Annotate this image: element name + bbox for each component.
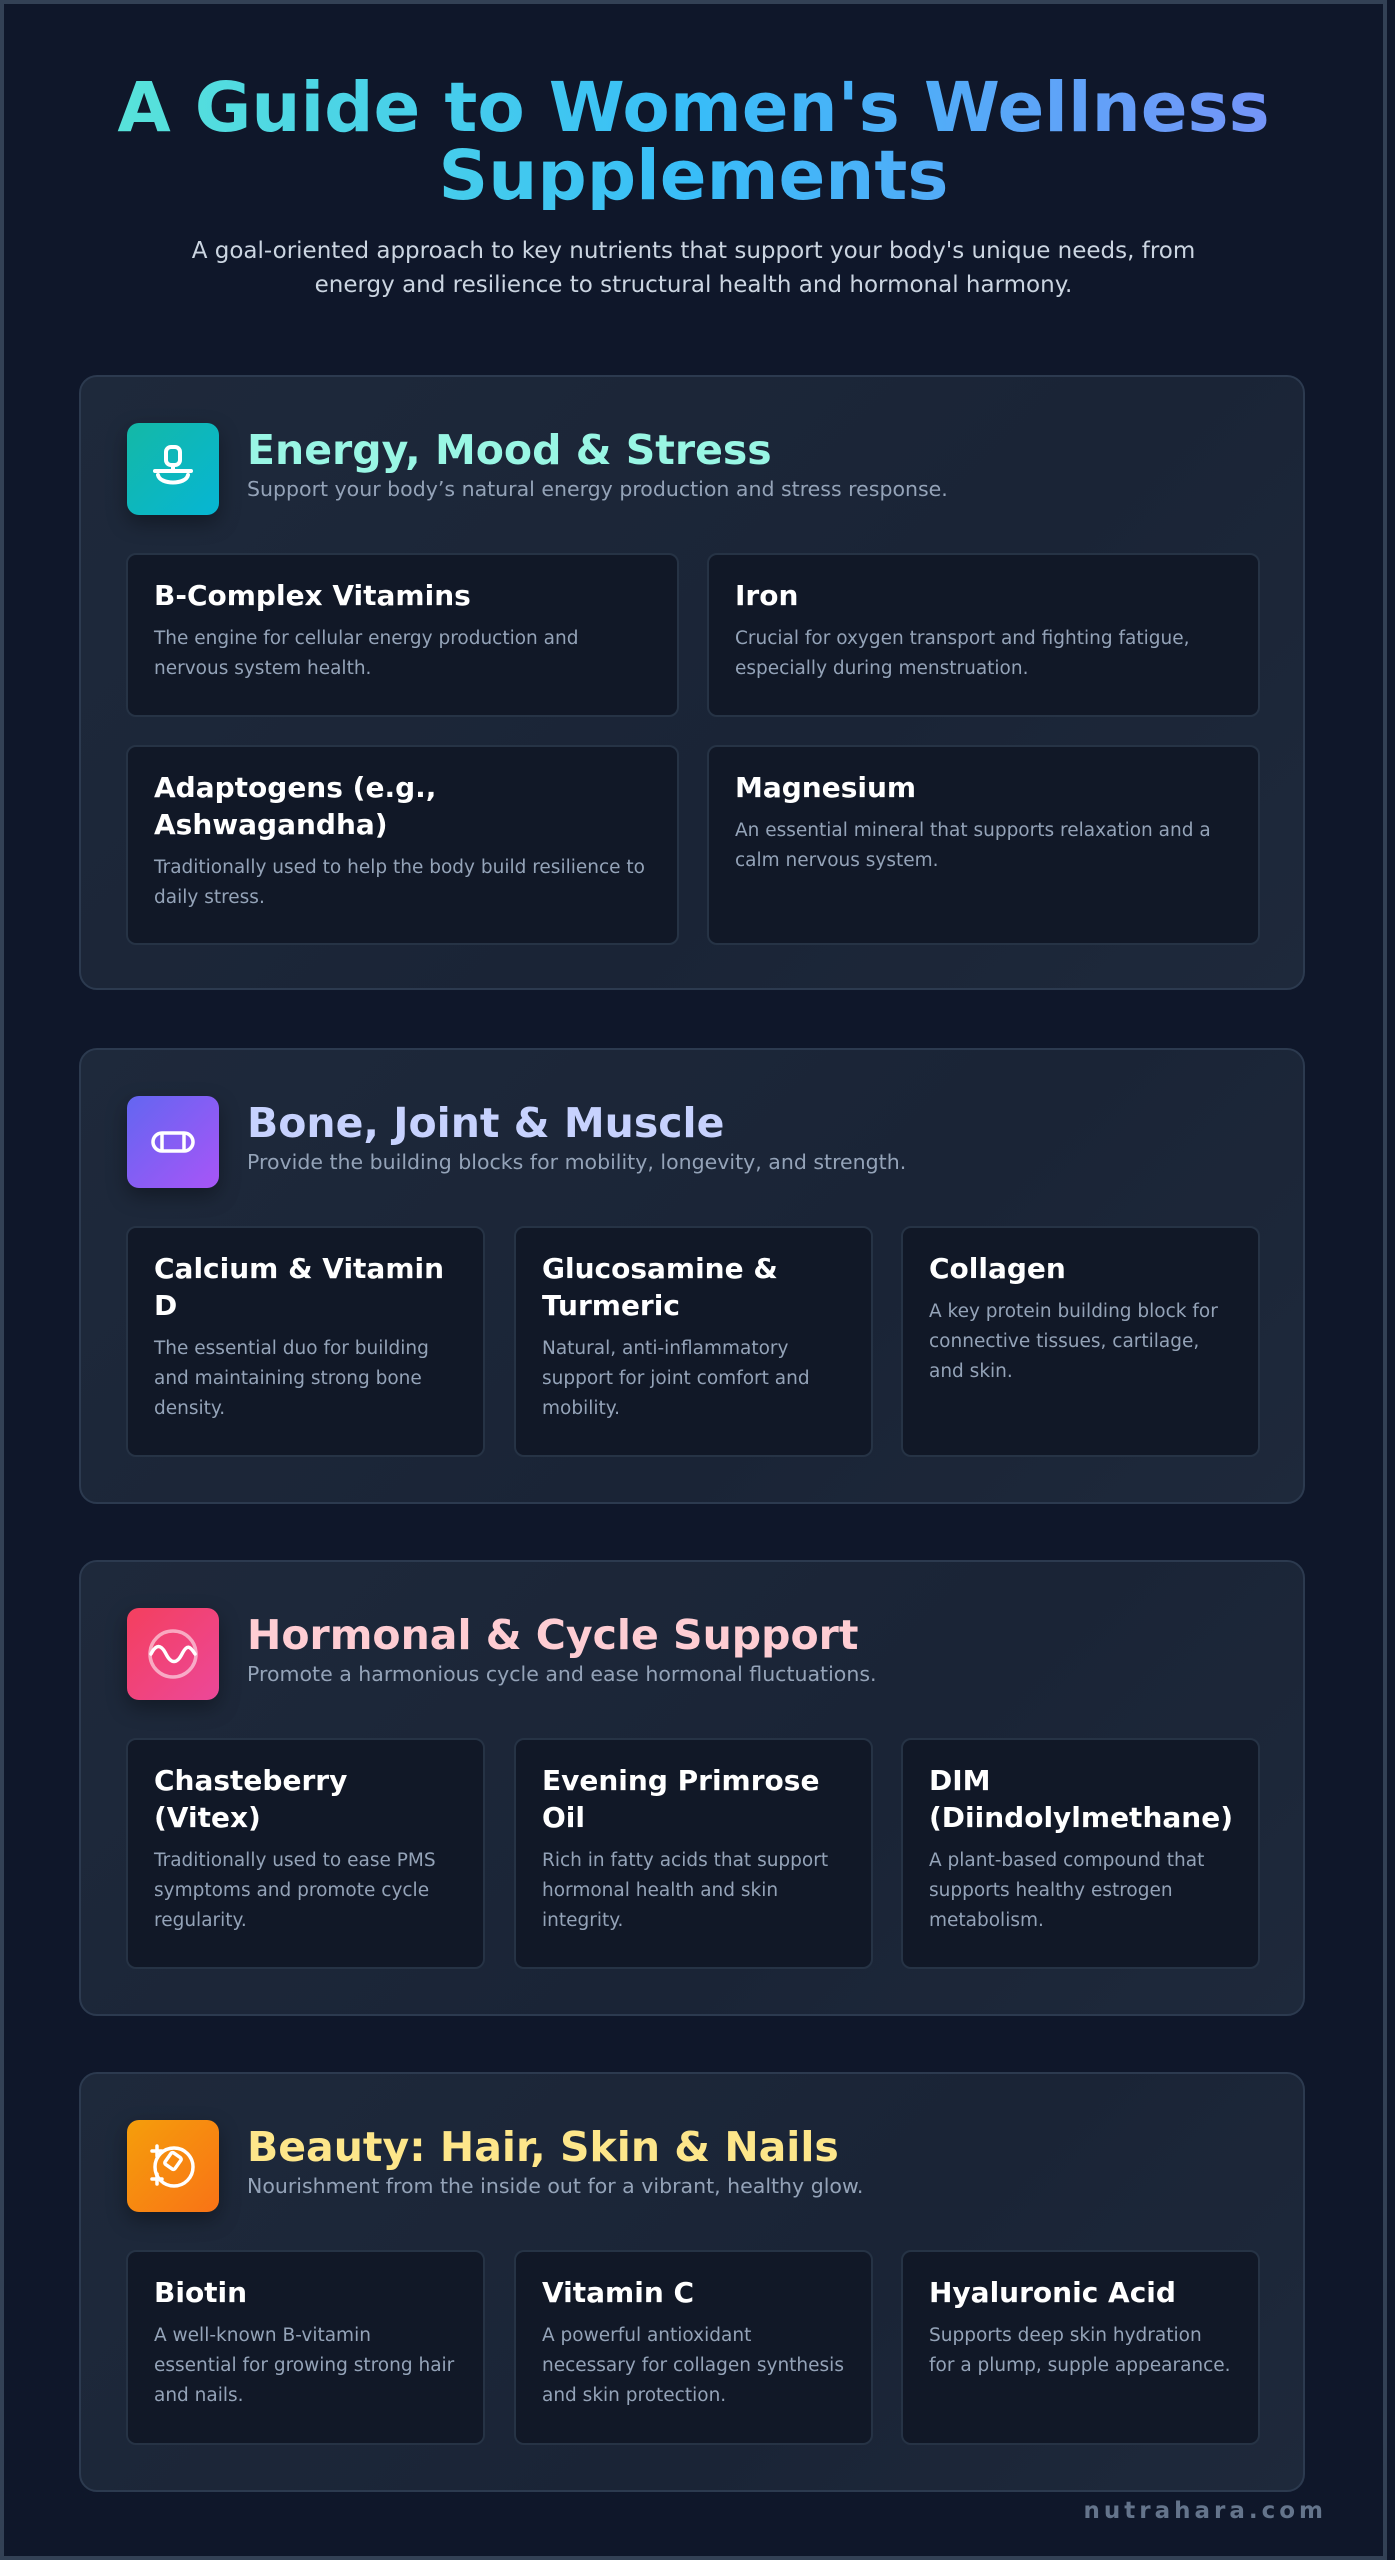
card: Vitamin C: necessary for collagen synthesis bbox=[542, 2355, 844, 2376]
card: B-Complex: nervous system health. bbox=[154, 658, 371, 679]
card: Collagen bbox=[901, 1226, 1260, 1457]
panel: beauty bbox=[79, 2072, 1305, 2492]
card: Glucosamine bbox=[514, 1226, 873, 1457]
card: B-Complex: B-Complex Vitamins bbox=[154, 579, 471, 612]
icon: hormone wave bbox=[127, 1608, 219, 1700]
card: Chasteberry bbox=[126, 1738, 485, 1969]
card: Biotin: essential for growing strong hair bbox=[154, 2355, 454, 2376]
card: Collagen: connective tissues, cartilage, bbox=[929, 1331, 1199, 1352]
card: B-Complex bbox=[126, 553, 679, 717]
card: Evening Primrose: hormonal health and skin bbox=[542, 1880, 778, 1901]
panel subtitle: Support your body’s natural energy production and stress response. bbox=[247, 477, 948, 501]
card: Magnesium: calm nervous system. bbox=[735, 850, 939, 871]
card: Adaptogens: Ashwagandha) bbox=[154, 808, 388, 841]
card: Calcium: D bbox=[154, 1289, 177, 1322]
card: Vitamin C bbox=[514, 2250, 873, 2445]
card: Glucosamine: support for joint comfort and bbox=[542, 1368, 810, 1389]
card: Chasteberry: symptoms and promote cycle bbox=[154, 1880, 429, 1901]
card: Adaptogens: daily stress. bbox=[154, 887, 265, 908]
card: Chasteberry: Traditionally used to ease PMS bbox=[154, 1850, 436, 1871]
card: Adaptogens: Traditionally used to help the body build resilience to bbox=[154, 857, 645, 878]
panel: bone, joint & muscle bbox=[79, 1048, 1305, 1504]
card: DIM: metabolism. bbox=[929, 1910, 1044, 1931]
panel: energy, mood & stress bbox=[79, 375, 1305, 990]
icon: bone bbox=[127, 1096, 219, 1188]
card: Vitamin C: A powerful antioxidant bbox=[542, 2325, 751, 2346]
card: Evening Primrose: integrity. bbox=[542, 1910, 623, 1931]
card: Evening Primrose bbox=[514, 1738, 873, 1969]
card: Biotin: A well-known B-vitamin bbox=[154, 2325, 371, 2346]
card: Magnesium bbox=[707, 745, 1260, 945]
card: Chasteberry: Chasteberry bbox=[154, 1764, 347, 1797]
card: Collagen: Collagen bbox=[929, 1252, 1066, 1285]
icon: energy bbox=[127, 423, 219, 515]
heading: Bone, Joint & Muscle bbox=[247, 1099, 724, 1147]
card: DIM: A plant-based compound that bbox=[929, 1850, 1204, 1871]
card: Iron bbox=[707, 553, 1260, 717]
card: Adaptogens bbox=[126, 745, 679, 945]
card: DIM: supports healthy estrogen bbox=[929, 1880, 1173, 1901]
card: Biotin bbox=[126, 2250, 485, 2445]
card: Glucosamine: Glucosamine & bbox=[542, 1252, 778, 1285]
card: Collagen: A key protein building block for bbox=[929, 1301, 1218, 1322]
card: Hyaluronic Acid: for a plump, supple appearance. bbox=[929, 2355, 1231, 2376]
card: Chasteberry: (Vitex) bbox=[154, 1801, 261, 1834]
card: Vitamin C: and skin protection. bbox=[542, 2385, 726, 2406]
card: Calcium: density. bbox=[154, 1398, 225, 1419]
card: Magnesium: An essential mineral that supports relaxation and a bbox=[735, 820, 1211, 841]
title: Supplements bbox=[439, 136, 948, 216]
card: DIM: (Diindolylmethane) bbox=[929, 1801, 1233, 1834]
card: Hyaluronic Acid: Supports deep skin hydration bbox=[929, 2325, 1202, 2346]
card: B-Complex: The engine for cellular energy production and bbox=[154, 628, 578, 649]
footer brand: nutrahara.com bbox=[1083, 2498, 1327, 2524]
card: Magnesium: Magnesium bbox=[735, 771, 916, 804]
panel subtitle: Provide the building blocks for mobility, longevity, and strength. bbox=[247, 1150, 906, 1174]
card: Glucosamine: Turmeric bbox=[542, 1289, 680, 1322]
card: DIM bbox=[901, 1738, 1260, 1969]
card: Calcium bbox=[126, 1226, 485, 1457]
heading: Hormonal & Cycle Support bbox=[247, 1611, 858, 1659]
card: Evening Primrose: Evening Primrose bbox=[542, 1764, 819, 1797]
card: Calcium: Calcium & Vitamin bbox=[154, 1252, 444, 1285]
panel: hormonal & cycle support bbox=[79, 1560, 1305, 2016]
icon: beauty bbox=[127, 2120, 219, 2212]
title: A Guide to Women's Wellness bbox=[117, 68, 1270, 148]
card: Glucosamine: mobility. bbox=[542, 1398, 620, 1419]
heading: Energy, Mood & Stress bbox=[247, 426, 772, 474]
card: Iron: especially during menstruation. bbox=[735, 658, 1028, 679]
card: Vitamin C: Vitamin C bbox=[542, 2276, 694, 2309]
card: Evening Primrose: Rich in fatty acids that support bbox=[542, 1850, 828, 1871]
title bbox=[0, 74, 1387, 210]
card: Calcium: and maintaining strong bone bbox=[154, 1368, 422, 1389]
card: Hyaluronic Acid bbox=[901, 2250, 1260, 2445]
heading: Beauty: Hair, Skin & Nails bbox=[247, 2123, 839, 2171]
card: Evening Primrose: Oil bbox=[542, 1801, 585, 1834]
card: Glucosamine: Natural, anti-inflammatory bbox=[542, 1338, 788, 1359]
subtitle: A goal-oriented approach to key nutrients that support your body's unique needs, from bbox=[192, 238, 1195, 264]
card: Biotin: Biotin bbox=[154, 2276, 247, 2309]
panel subtitle: Promote a harmonious cycle and ease hormonal fluctuations. bbox=[247, 1662, 877, 1686]
card: Calcium: The essential duo for building bbox=[154, 1338, 429, 1359]
card: Chasteberry: regularity. bbox=[154, 1910, 247, 1931]
card: Iron: Crucial for oxygen transport and fighting fatigue, bbox=[735, 628, 1190, 649]
panel subtitle: Nourishment from the inside out for a vibrant, healthy glow. bbox=[247, 2174, 863, 2198]
card: Biotin: and nails. bbox=[154, 2385, 244, 2406]
card: Iron: Iron bbox=[735, 579, 798, 612]
card: Adaptogens: Adaptogens (e.g., bbox=[154, 771, 436, 804]
card: Collagen: and skin. bbox=[929, 1361, 1013, 1382]
subtitle bbox=[192, 238, 1195, 298]
card: Hyaluronic Acid: Hyaluronic Acid bbox=[929, 2276, 1176, 2309]
subtitle: energy and resilience to structural health and hormonal harmony. bbox=[315, 272, 1072, 298]
card: DIM: DIM bbox=[929, 1764, 991, 1797]
